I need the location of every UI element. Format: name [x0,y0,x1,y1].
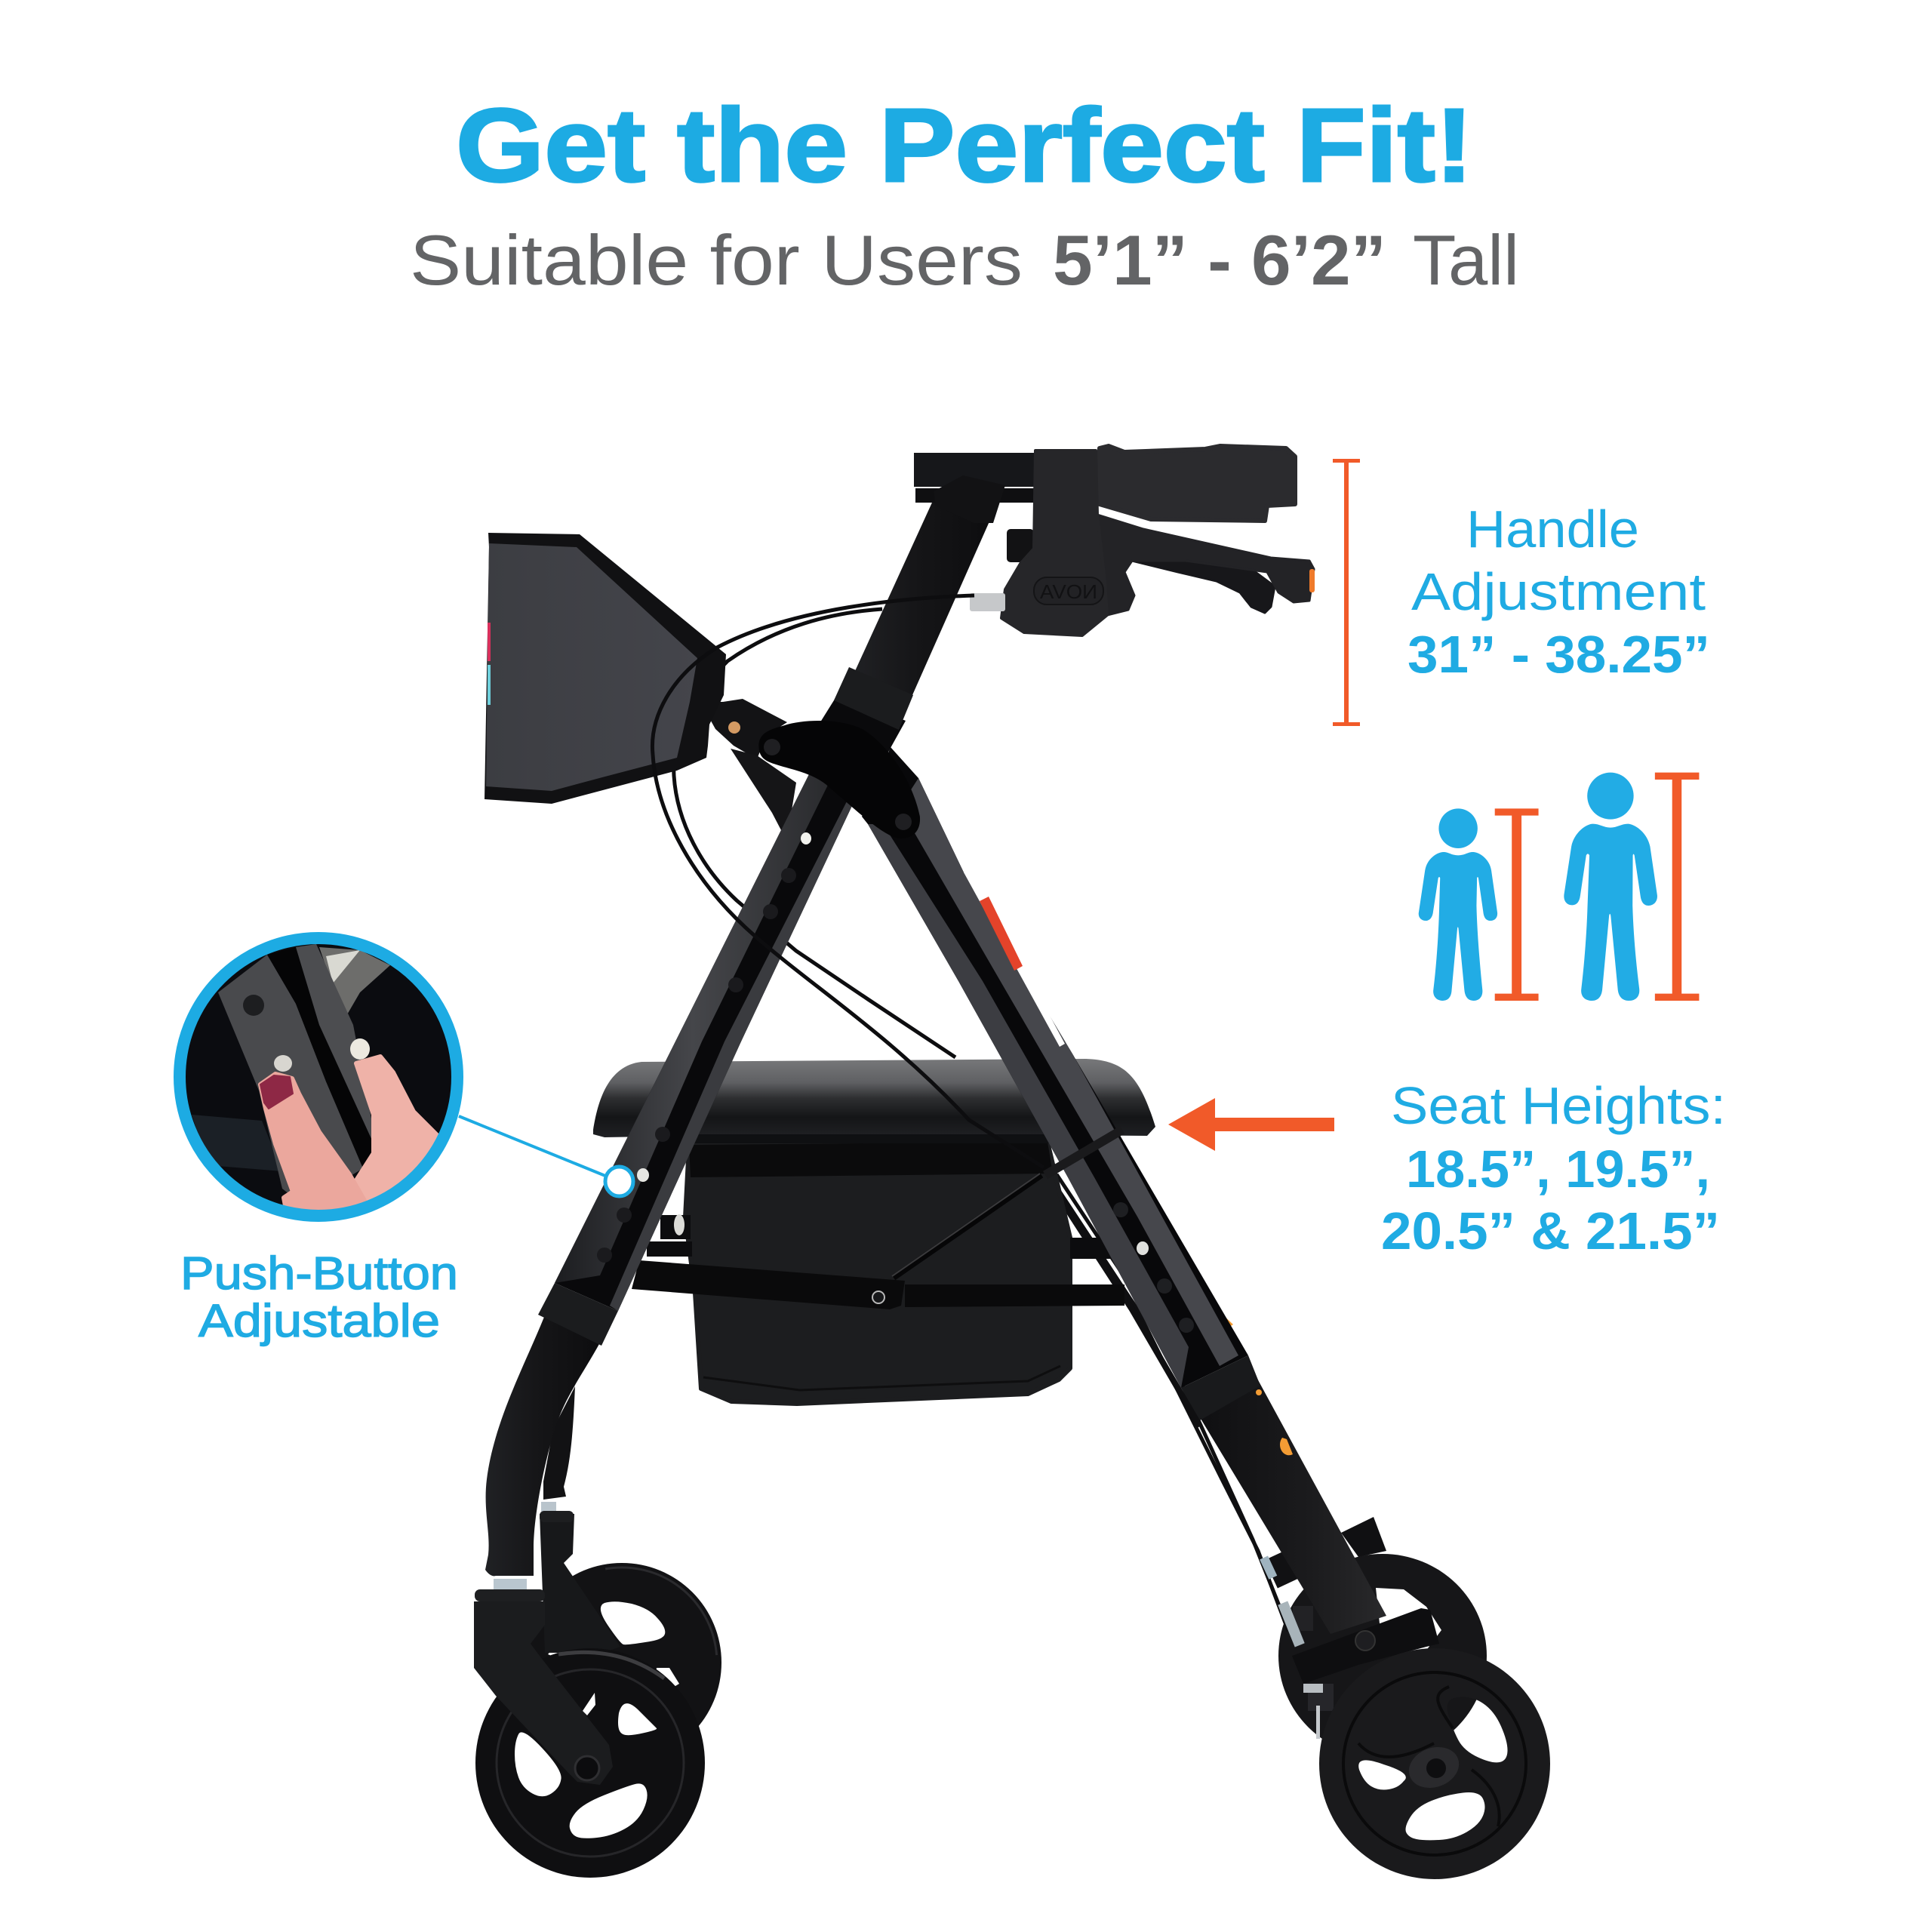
left leg collar [538,1283,618,1346]
left rear fork [540,1514,620,1653]
frame pivot plate [758,721,920,838]
left rear caster post [540,1386,575,1522]
seat heights label: 18.5”, 19.5”, [1406,1140,1710,1198]
side bars behind frame [647,1214,1112,1259]
left front wheel [475,1648,705,1878]
handle bar [914,453,1038,523]
brake cables lower right [1044,1168,1288,1631]
handle post tube [851,475,1001,702]
icon: tall figure [1564,773,1657,1001]
right leg collar [1181,1355,1260,1420]
callout label: Push-Button [180,1247,458,1299]
front cable [652,595,1044,1168]
backrest pad [485,533,726,804]
brake lever upper [1097,515,1314,615]
infographic: rollator fit guide [174,104,1721,1879]
handle adjustment label [1407,500,1710,684]
brake clamp body: NOVA [1039,580,1097,603]
seat heights label [1381,1076,1726,1260]
seat heights label: Seat Heights: [1391,1076,1726,1135]
right small brake bracket [1341,1517,1386,1557]
short height bracket [1495,808,1539,1001]
left lower tube [485,1309,608,1576]
seat heights label: 20.5” & 21.5” [1381,1201,1720,1260]
right front wheel [1319,1648,1550,1879]
under-seat cross bar [632,1260,1124,1309]
brake knob [1007,529,1034,562]
rear cable lower [674,609,955,1057]
seat cushion [593,1059,1155,1143]
cable connector [970,593,1005,611]
diagonal rod [892,1174,1041,1278]
storage basket [685,1142,1070,1404]
callout label [180,1247,458,1346]
callout label: Adjustable [198,1295,440,1346]
left front washer [494,1579,527,1591]
brass pin [728,721,740,734]
brake clamp body [1001,451,1107,635]
backrest mount arm [700,699,787,759]
tall height bracket [1655,773,1699,1001]
rollator product illustration [474,446,1550,1879]
hand grip [1100,446,1295,521]
subtitle: Tall [1413,220,1519,300]
post collar [834,667,913,730]
left rear wheel [512,1552,732,1773]
callout anchor dot [605,1167,633,1196]
lever tip reflector [1309,569,1315,592]
left front fork [474,1589,613,1785]
right lower tube [1196,1377,1386,1634]
subtitle [410,220,1519,300]
icon: short and tall user figures [1419,773,1699,1001]
icon: short figure [1419,808,1497,1001]
handle adjustment label: 31” - 38.25” [1407,625,1710,684]
right frame leg [862,747,1248,1388]
handle adjustment label: Adjustment [1411,562,1706,621]
cable tie strap [1045,1130,1122,1175]
right rear wheel [1278,1554,1487,1758]
right lower bracket [1292,1608,1439,1684]
handle height bracket [1333,459,1360,726]
brake lever lower [1132,555,1275,613]
brake mechanism [1260,1551,1334,1739]
callout: push-button close-up photo [174,932,463,1222]
mount gusset [731,749,796,830]
orange tube markings [1214,1312,1293,1455]
handle adjustment label: Handle [1466,500,1639,558]
subtitle: Suitable for Users [410,220,1023,300]
callout leader line [459,1116,605,1176]
seat height arrow [1168,1098,1334,1151]
post inner section [819,694,906,755]
subtitle: 5’1” - 6’2” [1053,220,1386,300]
left frame leg [555,770,857,1311]
title: Get the Perfect Fit! [456,88,1473,204]
